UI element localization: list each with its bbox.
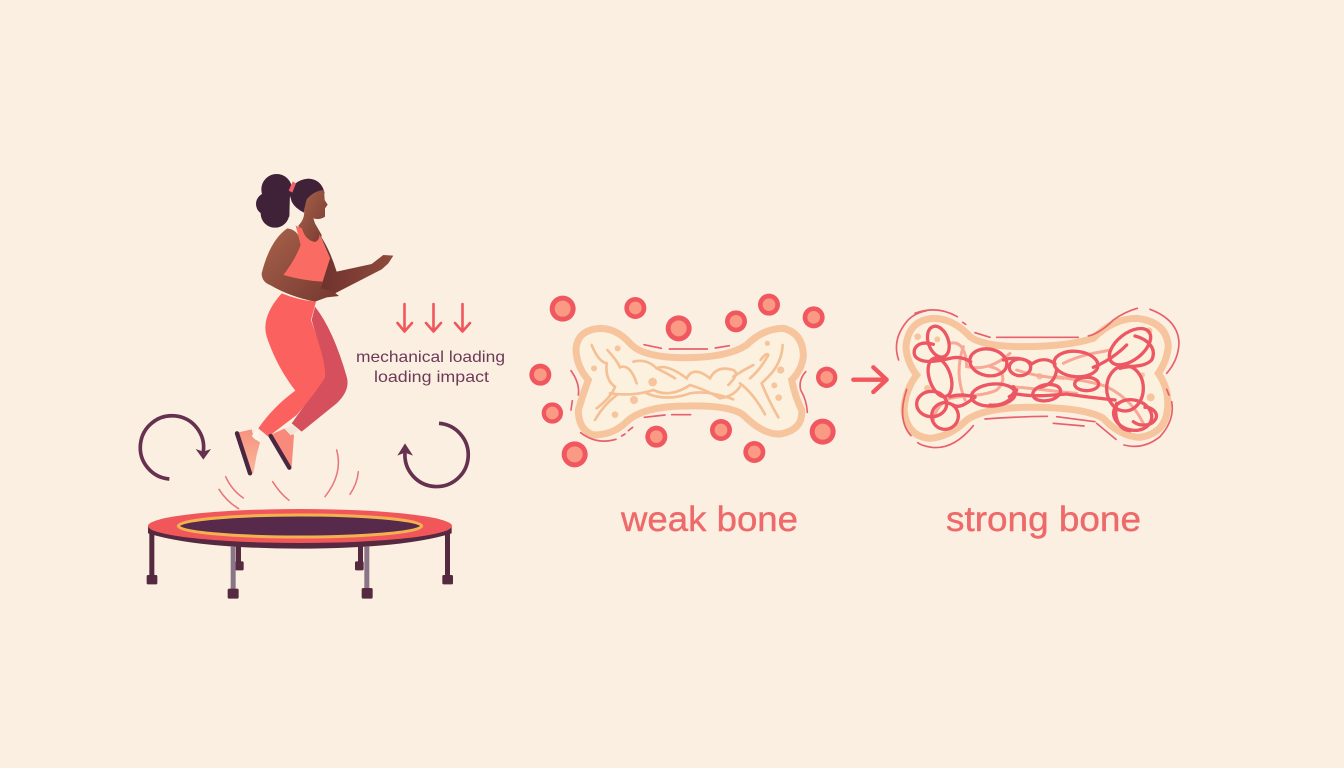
shoes [237,425,299,474]
trampoline [147,509,453,599]
frame underside [148,527,452,549]
near arm and midriff [262,228,339,302]
dense red trabeculae [914,321,1157,434]
hair [256,174,325,228]
strong bone outline [904,318,1168,438]
weak bone outline [576,328,803,435]
progress arrow [853,367,887,392]
loading arrows [398,304,470,332]
bone marrow specks [591,341,784,418]
reinforcement contour lines [896,308,1179,448]
cycle arrow: left [140,416,211,479]
front leg [258,293,325,437]
dot centres [534,298,833,462]
mechanical loading label: loading impact [374,369,490,386]
weak bone illustration [529,294,837,467]
hair band [289,181,296,193]
padded rim [148,509,452,543]
cycle arrow: right [397,423,468,487]
motion lines [219,450,358,509]
thin trabeculae [933,343,1143,423]
figure: woman jumping [256,174,393,437]
face and neck [298,190,328,245]
mechanical loading label [356,349,505,386]
label: weak bone: weak bone [620,500,798,539]
crop top [283,226,330,282]
sparse trabecular lines [592,345,783,420]
back arm [317,235,393,293]
back leg [292,307,348,432]
strong bone illustration [896,308,1179,448]
mechanical loading label: mechanical loading [356,349,505,366]
lost mineral dots [529,294,837,467]
label: strong bone: strong bone [946,500,1141,539]
marrow specks [914,327,1155,401]
trampoline legs [147,532,453,599]
jump mat [178,515,422,537]
stress marks [571,345,807,441]
